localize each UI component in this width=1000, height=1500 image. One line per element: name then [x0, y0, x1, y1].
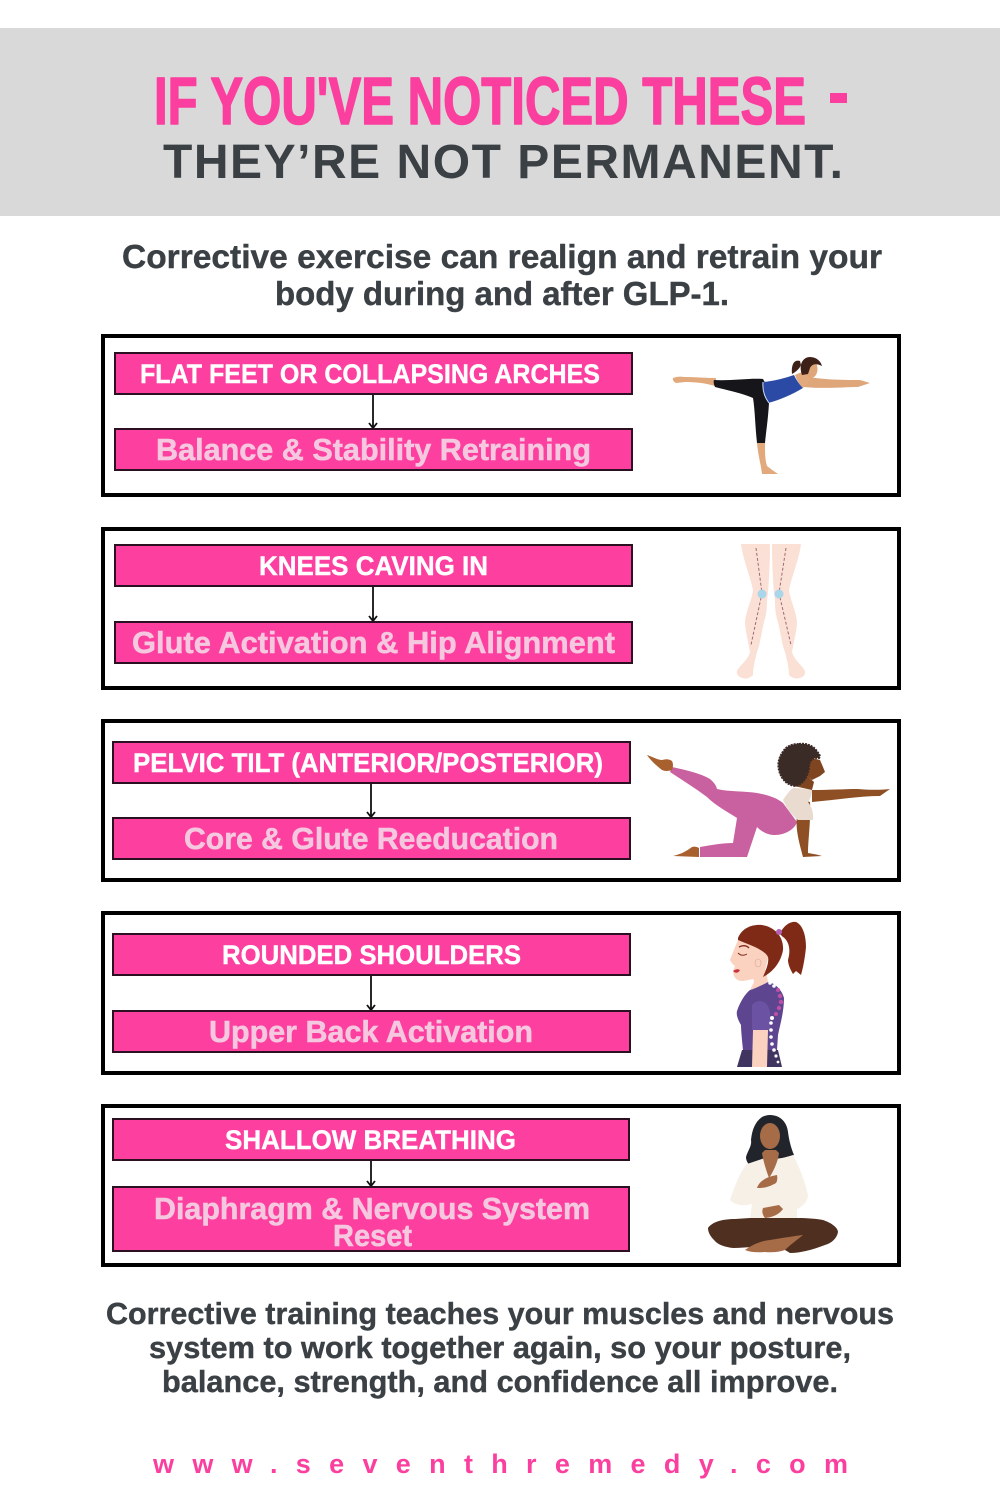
- panel: pelvic tilt: [103, 721, 899, 880]
- closing text: system to work together again, so your posture,: [149, 1330, 851, 1365]
- panel: shallow breathing: [103, 1106, 899, 1265]
- solution bar: [113, 1011, 630, 1052]
- arrow: [369, 587, 377, 621]
- intro text: [122, 238, 882, 312]
- website url: www.seventhremedy.com: [152, 1449, 848, 1479]
- subtitle: THEY’RE NOT PERMANENT.: [163, 136, 843, 189]
- panel: flat feet: [103, 336, 899, 495]
- problem bar: PELVIC TILT (ANTERIOR/POSTERIOR): [133, 748, 603, 778]
- icon: balancing woman: [673, 357, 870, 474]
- problem bar: [113, 1119, 629, 1160]
- problem bar: [113, 934, 630, 975]
- closing text: balance, strength, and confidence all improve.: [162, 1364, 838, 1399]
- problem bar: KNEES CAVING IN: [259, 551, 488, 581]
- solution bar: [113, 1187, 629, 1253]
- intro text: body during and after GLP-1.: [275, 275, 729, 312]
- header banner: [0, 28, 1000, 216]
- problem bar: [115, 353, 632, 394]
- closing text: Corrective training teaches your muscles and nervous: [106, 1296, 894, 1331]
- problem bar: [113, 742, 630, 783]
- icon: woman in profile with curved spine: [730, 922, 806, 1067]
- arrow: [367, 784, 375, 817]
- panel: knees caving in: [103, 529, 899, 688]
- arrow: [367, 976, 375, 1010]
- solution bar: Balance & Stability Retraining: [156, 432, 591, 467]
- problem bar: SHALLOW BREATHING: [225, 1125, 516, 1155]
- solution bar: Upper Back Activation: [209, 1014, 533, 1049]
- solution bar: [113, 818, 630, 859]
- icon: legs with knees caving in: [737, 544, 805, 679]
- solution bar: Glute Activation & Hip Alignment: [132, 625, 615, 660]
- solution bar: Diaphragm & Nervous System: [154, 1191, 590, 1226]
- solution bar: Reset: [333, 1218, 412, 1253]
- panel: rounded shoulders: [103, 913, 899, 1073]
- arrow: [367, 1161, 375, 1186]
- problem bar: FLAT FEET OR COLLAPSING ARCHES: [140, 359, 600, 389]
- arrow: [369, 395, 377, 428]
- icon: seated woman breathing: [708, 1115, 838, 1253]
- icon: woman on all fours with raised leg: [647, 744, 890, 857]
- intro text: Corrective exercise can realign and retrain your: [122, 238, 882, 275]
- problem bar: [115, 545, 632, 586]
- problem bar: ROUNDED SHOULDERS: [222, 940, 521, 970]
- title dash: [830, 93, 847, 103]
- closing text: [106, 1296, 894, 1399]
- solution bar: Core & Glute Reeducation: [184, 821, 558, 856]
